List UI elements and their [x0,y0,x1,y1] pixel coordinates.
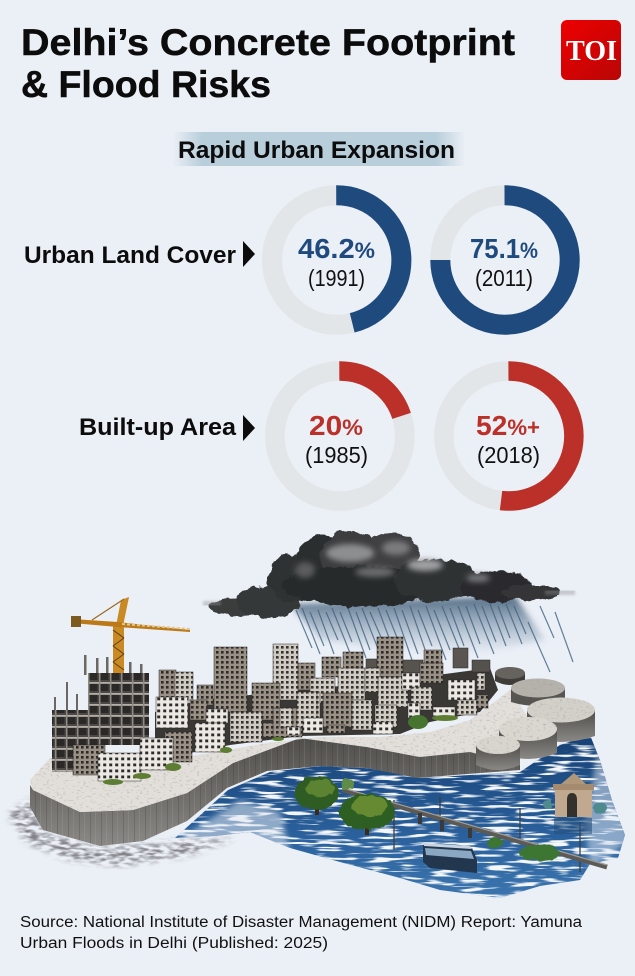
flood water [175,737,625,898]
small tree behind [341,778,355,790]
ground shadow [8,798,235,866]
donut: built-up area 1985: (1985) [305,442,368,468]
city blocks [155,637,498,762]
crane [71,597,190,675]
donut: urban land cover 2011 [440,195,570,325]
title: Delhi’s Concrete Footprint [21,22,515,63]
concrete footprint slab [30,690,530,846]
title: & Flood Risks [21,64,271,105]
rain wash [290,596,545,655]
tree right [339,794,395,835]
India Gate [553,773,594,834]
bus [423,843,477,873]
row label: Built-up Area: Built-up Area [79,414,237,441]
donut: urban land cover 1991 [272,195,401,325]
toe: third [499,717,557,759]
illustration: concrete footprint city in flood [8,531,635,905]
donut: built-up area 2018 [444,371,574,501]
donut: built-up area 1985 [275,371,405,501]
donut: built-up area 1985: 20% [309,410,363,441]
donut: urban land cover 1991: 46.2% [298,233,375,264]
greenery [103,715,458,785]
toe: small back [495,667,525,685]
donut: urban land cover 2011: (2011) [475,265,533,291]
cloud and rain [203,531,575,672]
rain streaks [296,604,573,672]
middle row [156,663,485,728]
source note: Urban Floods in Delhi (Published: 2025) [20,935,328,952]
front row [165,692,488,762]
toe: second [511,678,565,706]
source note: Source: National Institute of Disaster Management (NIDM) Report: Yamuna [20,914,582,931]
front low buildings [73,738,173,781]
rear towers [159,637,490,712]
small trees by gate [543,799,607,814]
dark backdrop of the city [155,668,498,755]
cloud highlights [295,541,490,582]
toe: front [476,736,520,770]
section heading: Rapid Urban Expansion [178,137,455,164]
row label: Urban Land Cover: Urban Land Cover [24,242,236,269]
donut: built-up area 2018: (2018) [477,442,540,468]
source note [20,914,582,952]
bridge [343,788,607,872]
icon: TOI logo: TOI [566,35,617,67]
icon: TOI logo [561,20,621,80]
donut: urban land cover 1991: (1991) [308,265,365,291]
donut: built-up area 2018: 52%+ [476,410,540,441]
bushes in water [487,837,560,861]
toe: big [527,698,595,742]
cloud mass [210,531,562,618]
donut: urban land cover 2011: 75.1% [470,233,538,264]
tree left [295,776,339,815]
title [21,22,515,105]
building under construction [52,655,149,772]
